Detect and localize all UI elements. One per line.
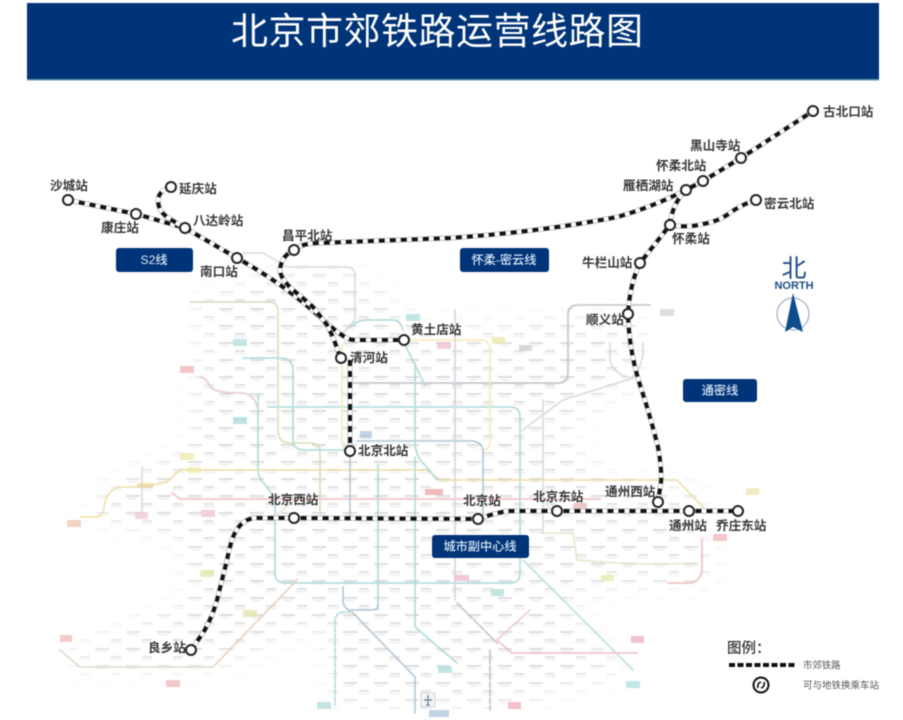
subway lines (60, 253, 703, 713)
icon: north compass (774, 255, 814, 332)
station: 牛栏山站: 牛栏山站 (582, 255, 633, 270)
rail: Qinghe to Beijing North (348, 360, 352, 451)
rail: Huairou to Miyun North branch (670, 200, 756, 226)
legend: transfer station sample (754, 678, 880, 692)
legend (727, 640, 880, 692)
station: 乔庄东站 (716, 506, 767, 533)
line label: 怀柔-密云线 (460, 248, 549, 272)
line label: S2线: S2线 (140, 252, 168, 267)
icon: north compass: 北 (781, 255, 807, 283)
station: 延庆站 (166, 181, 217, 196)
station: 怀柔站 (665, 220, 710, 246)
station: 北京东站 (533, 489, 584, 516)
station: 清河站: 清河站 (350, 350, 388, 365)
rail: sub-center line (191, 511, 738, 650)
line terminus chips (60, 309, 759, 717)
line label: 怀柔-密云线: 怀柔-密云线 (472, 252, 536, 267)
subway map background (50, 253, 759, 717)
station: 南口站 (200, 253, 242, 279)
station: 雁栖湖站: 雁栖湖站 (623, 178, 674, 193)
rail: S2 Yanqing branch (158, 187, 185, 228)
station: 北京站: 北京站 (463, 493, 501, 508)
station: 北京西站: 北京西站 (268, 492, 319, 507)
legend: transfer station sample: 可与地铁换乘车站 (803, 680, 880, 692)
rail: Tongmi line (628, 190, 686, 502)
legend: suburban rail sample: 市郊铁路 (803, 660, 841, 670)
tiny station label texture (50, 260, 730, 710)
station: 密云北站: 密云北站 (764, 196, 815, 211)
station: 通州站 (669, 506, 707, 533)
station: 乔庄东站: 乔庄东站 (716, 518, 767, 533)
station: 黑山寺站 (690, 138, 746, 163)
station: 沙城站: 沙城站 (50, 178, 88, 193)
station: 通州西站: 通州西站 (605, 484, 656, 499)
line label: 通密线 (683, 379, 757, 402)
station: 沙城站 (50, 178, 88, 205)
icon: airport (421, 693, 435, 707)
station: 北京西站 (268, 492, 319, 523)
station: 顺义站 (586, 309, 633, 327)
station: 通州西站 (605, 484, 663, 507)
station: 北京站 (463, 493, 501, 524)
title banner (27, 3, 879, 80)
rail: Huairou-Miyun line west section (280, 111, 813, 357)
station: 古北口站: 古北口站 (823, 104, 874, 119)
station: 北京东站: 北京东站 (533, 489, 584, 504)
title: 北京市郊铁路运营线路图 (231, 11, 643, 52)
station: 怀柔北站 (656, 158, 708, 186)
station: 昌平北站 (282, 228, 333, 255)
station: 雁栖湖站 (623, 178, 691, 195)
station: 康庄站: 康庄站 (101, 220, 139, 235)
station: 八达岭站: 八达岭站 (193, 213, 244, 228)
station: 延庆站: 延庆站 (179, 181, 217, 196)
station: 怀柔北站: 怀柔北站 (656, 158, 707, 173)
station: 昌平北站: 昌平北站 (282, 228, 333, 243)
station: 北京北站: 北京北站 (358, 443, 409, 458)
station: 黑山寺站: 黑山寺站 (690, 138, 741, 153)
legend: suburban rail sample (729, 660, 841, 670)
line label: S2线 (116, 248, 193, 272)
station: 良乡站: 良乡站 (148, 640, 186, 655)
station: 黄土店站: 黄土店站 (411, 322, 462, 337)
station: 密云北站 (751, 195, 815, 211)
station: 康庄站 (101, 209, 141, 235)
legend title: 图例： (727, 640, 770, 657)
line label: 通密线: 通密线 (702, 382, 738, 398)
rail: S2 main line (68, 200, 404, 340)
station: 黄土店站 (399, 322, 462, 345)
icon: north compass: NORTH (774, 280, 814, 292)
line label: 城市副中心线: 城市副中心线 (443, 538, 517, 554)
station: 怀柔站: 怀柔站 (672, 231, 710, 246)
line label: 城市副中心线 (432, 535, 529, 558)
station: 清河站 (336, 350, 388, 365)
station: 通州站: 通州站 (669, 518, 707, 533)
station: 顺义站: 顺义站 (586, 312, 624, 327)
station: 南口站: 南口站 (200, 264, 238, 279)
station: 八达岭站 (180, 213, 244, 233)
